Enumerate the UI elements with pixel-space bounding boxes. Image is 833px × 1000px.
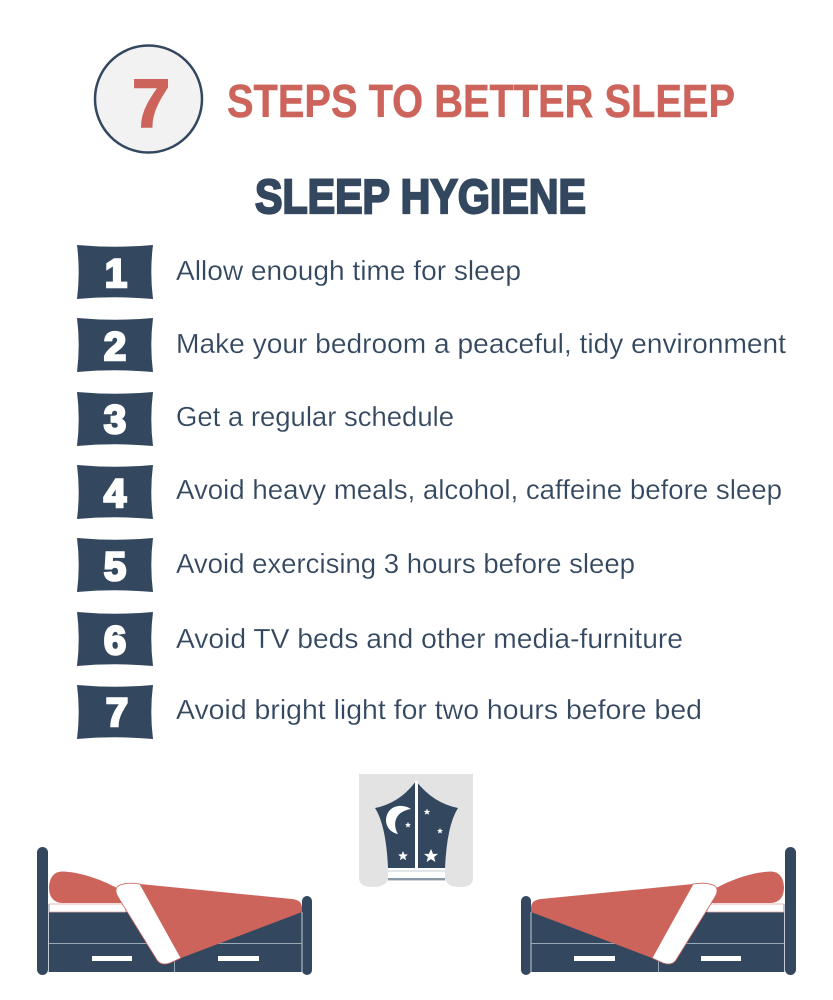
step 1 — [77, 245, 521, 299]
step 6 — [77, 612, 683, 666]
step 6: 6 — [104, 619, 126, 663]
step 3: 3 — [104, 398, 126, 442]
step 7: Avoid bright light for two hours before bed — [176, 694, 702, 725]
step 4: 4 — [104, 472, 127, 516]
step 2 — [77, 318, 786, 372]
step 4: Avoid heavy meals, alcohol, caffeine before sleep — [176, 474, 782, 505]
step 6: Avoid TV beds and other media-furniture — [176, 623, 683, 654]
step 3: Get a regular schedule — [176, 401, 454, 432]
step 3 — [77, 392, 454, 446]
step 7 — [77, 685, 702, 739]
heading: sleep hygiene: SLEEP HYGIENE — [255, 171, 586, 224]
step 2: Make your bedroom a peaceful, tidy environment — [176, 328, 786, 359]
step 1: Allow enough time for sleep — [176, 255, 521, 286]
step 2: 2 — [104, 325, 126, 369]
step 1: 1 — [105, 252, 127, 296]
icon: night window with curtains — [359, 774, 473, 887]
badge: number 7 circle: 7 — [132, 65, 170, 142]
step 5: Avoid exercising 3 hours before sleep — [176, 548, 635, 579]
step 7: 7 — [106, 691, 128, 735]
step 5: 5 — [104, 545, 126, 589]
title: STEPS TO BETTER SLEEP — [227, 75, 735, 127]
badge: number 7 circle — [95, 46, 202, 152]
step 5 — [77, 538, 635, 592]
icon: right bed — [521, 847, 796, 975]
step 4 — [77, 465, 782, 519]
icon: left bed — [37, 847, 312, 975]
